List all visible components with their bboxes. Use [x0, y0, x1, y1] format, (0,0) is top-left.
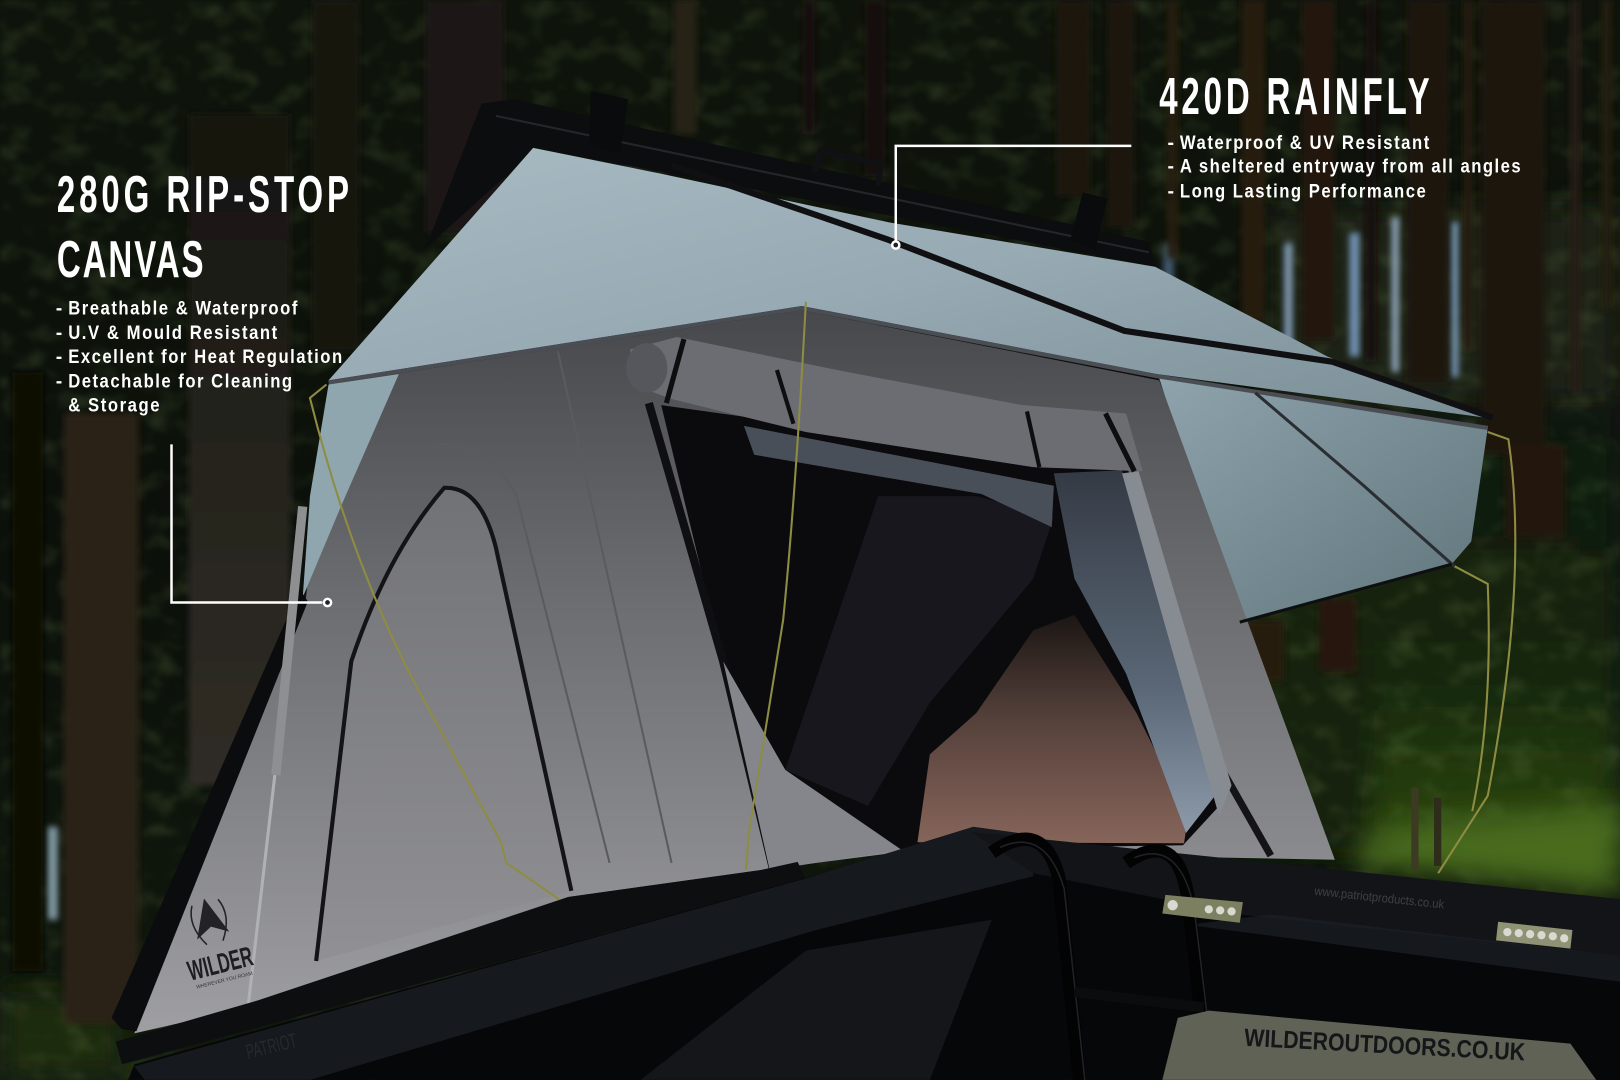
logo [172, 891, 257, 992]
feature list: rainfly [1167, 132, 1521, 203]
vehicle roof rack and truck [116, 827, 1620, 1080]
ladder [992, 839, 1215, 1080]
tent [112, 91, 1515, 1033]
truck side panel [1162, 1011, 1596, 1080]
feature list: canvas [56, 297, 342, 416]
tent wall [134, 310, 1335, 1033]
truck website text: WILDEROUTDOORS.CO.UK [1244, 1025, 1526, 1066]
patriot rack text: PATRIOT [244, 1029, 300, 1064]
gas strut [248, 506, 303, 1008]
fly side panel left [303, 374, 399, 597]
logo: WHEREVER YOU ROAM [196, 971, 253, 991]
roof frame [426, 91, 1155, 267]
door opening [649, 403, 1271, 868]
feature list: canvas: Excellent for Heat Regulation [68, 346, 342, 367]
leader line: rainfly [892, 146, 1131, 249]
callout: 420d rainfly [892, 69, 1521, 249]
feature list: rainfly: Long Lasting Performance [1180, 180, 1426, 202]
feature list: rainfly: - [1167, 181, 1174, 203]
heading: 280G rip-stop canvas [57, 167, 349, 289]
feature list: canvas: - [56, 322, 62, 344]
heading: 420D rainfly: 420D RAINFLY [1159, 69, 1430, 126]
feature list: rainfly: Waterproof & UV Resistant [1180, 132, 1429, 153]
feature list: canvas: Breathable & Waterproof [68, 297, 298, 319]
feature list: canvas: - [56, 371, 62, 393]
leader line: canvas [172, 444, 331, 606]
left frame edge [112, 589, 308, 1031]
rainfly [329, 148, 1493, 419]
heading: 280G rip-stop canvas: CANVAS [57, 232, 204, 289]
feature list: rainfly: - [1167, 132, 1174, 154]
feature list: canvas: Detachable for Cleaning [68, 370, 292, 392]
feature list: canvas: U.V & Mould Resistant [68, 322, 277, 343]
feature list: canvas: - [56, 346, 62, 368]
fly strap [672, 165, 1493, 418]
feature list: rainfly: A sheltered entryway from all angles [1180, 155, 1521, 177]
window left panel [316, 351, 672, 961]
rolled door [626, 337, 1143, 471]
feature list: canvas: - [56, 297, 62, 319]
rack url: www.patriotproducts.co.uk [1313, 884, 1446, 912]
logo: WILDER [184, 940, 256, 987]
light bars [1162, 895, 1572, 949]
callout: 280g rip-stop canvas [56, 167, 349, 606]
bright grass [1343, 806, 1620, 894]
feature list: rainfly: - [1167, 156, 1174, 178]
heading: 280G rip-stop canvas: 280G RIP-STOP [57, 167, 349, 224]
tan mesh [917, 615, 1188, 843]
guy wires [310, 302, 1515, 904]
door flap curve [723, 661, 901, 870]
feature list: canvas: & Storage [68, 394, 160, 416]
fly side panel right [1159, 378, 1488, 622]
quilted liner [1054, 470, 1215, 833]
